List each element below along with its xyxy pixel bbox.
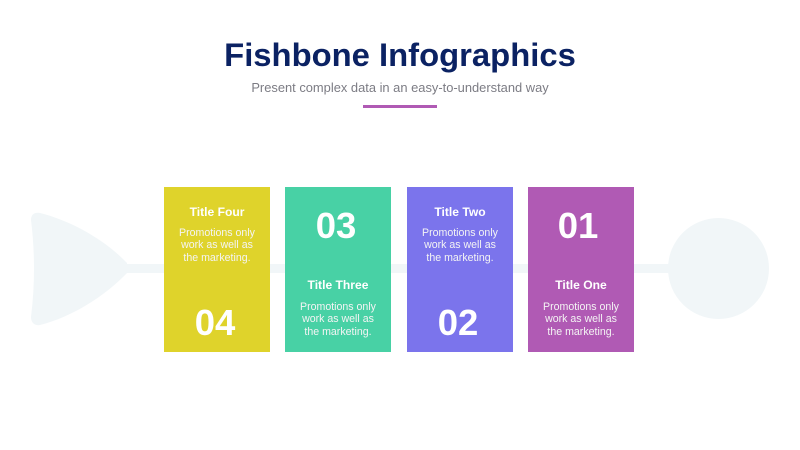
card four number: 04 (195, 302, 235, 343)
fish head (668, 218, 769, 319)
card four body text: work as well as (181, 239, 253, 251)
fish spine (125, 264, 675, 273)
card: title four (164, 187, 270, 352)
card three body text: the marketing. (304, 326, 372, 338)
card one body text: Promotions only (543, 301, 619, 313)
subtitle: Present complex data in an easy-to-understand way (251, 80, 549, 95)
title: Fishbone Infographics (224, 36, 576, 73)
card one body text: work as well as (545, 313, 617, 325)
card three body text: Promotions only (300, 301, 376, 313)
card one number: 01 (558, 205, 598, 246)
card two number: 02 (438, 302, 478, 343)
card two body text: work as well as (424, 239, 496, 251)
card four body text (179, 227, 255, 264)
card three body text (300, 301, 376, 338)
card two body text (422, 227, 498, 264)
card one body text: the marketing. (547, 326, 615, 338)
card four heading: Title Four (190, 205, 244, 219)
card two body text: Promotions only (422, 227, 498, 239)
card three heading: Title Three (308, 278, 368, 292)
card one heading: Title One (555, 278, 607, 292)
card three number: 03 (316, 205, 356, 246)
card: title one (528, 187, 634, 352)
card four body text: the marketing. (183, 252, 251, 264)
fish tail (31, 213, 127, 325)
card: title three (285, 187, 391, 352)
accent underline (363, 105, 437, 108)
card: title two (407, 187, 513, 352)
card one body text (543, 301, 619, 338)
card four body text: Promotions only (179, 227, 255, 239)
card two heading: Title Two (434, 205, 486, 219)
card three body text: work as well as (302, 313, 374, 325)
card two body text: the marketing. (426, 252, 494, 264)
